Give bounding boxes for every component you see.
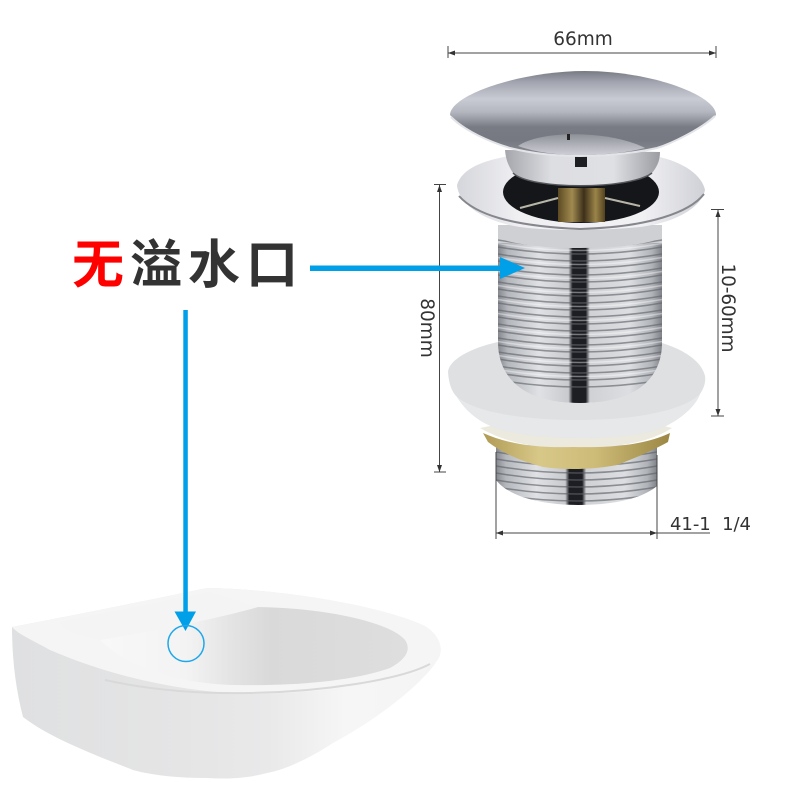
gasket lip — [457, 394, 700, 438]
flange lip — [459, 194, 704, 229]
flange underside — [498, 226, 662, 248]
collar centre mark — [575, 150, 587, 167]
cap pin — [567, 134, 570, 140]
dimension: 10-60mm — [711, 210, 738, 416]
flange — [457, 156, 705, 230]
gasket lower band — [480, 420, 672, 448]
cap lower edge — [451, 116, 715, 156]
dimension: 80mm: 80mm — [416, 298, 437, 358]
sink basin bowl — [100, 607, 408, 685]
collar — [505, 150, 660, 186]
drain opening — [503, 161, 659, 223]
sink outer body — [12, 588, 441, 778]
drain spokes — [520, 198, 640, 208]
arrow: to drain tube — [310, 257, 525, 279]
lower thread — [496, 445, 657, 506]
rim front edge — [105, 664, 430, 693]
collar highlight — [513, 173, 652, 186]
heading: no overflow: 无溢水口 — [72, 237, 304, 295]
dimension: 66mm — [448, 29, 716, 58]
sink soap shelf — [60, 592, 258, 640]
threaded tube — [498, 225, 662, 405]
white gasket — [448, 342, 705, 438]
dimension: 41-1 1/4 — [496, 452, 751, 539]
cap inner — [518, 134, 645, 155]
arrow: to basin — [174, 310, 196, 631]
callout circle: no overflow hole — [168, 626, 204, 662]
cap — [450, 71, 716, 156]
dimension: 66mm: 66mm — [553, 29, 613, 50]
dimension: 10-60mm: 10-60mm — [717, 264, 738, 352]
dimension: 41-1 1/4: 41-1 1/4 — [670, 514, 751, 535]
illustration: wash basin — [12, 588, 441, 778]
illustration: pop-up drain — [448, 71, 716, 506]
brass nut — [483, 433, 670, 469]
sink rim top — [12, 588, 441, 694]
brass stem — [558, 188, 605, 222]
dimension: 80mm — [416, 184, 446, 472]
